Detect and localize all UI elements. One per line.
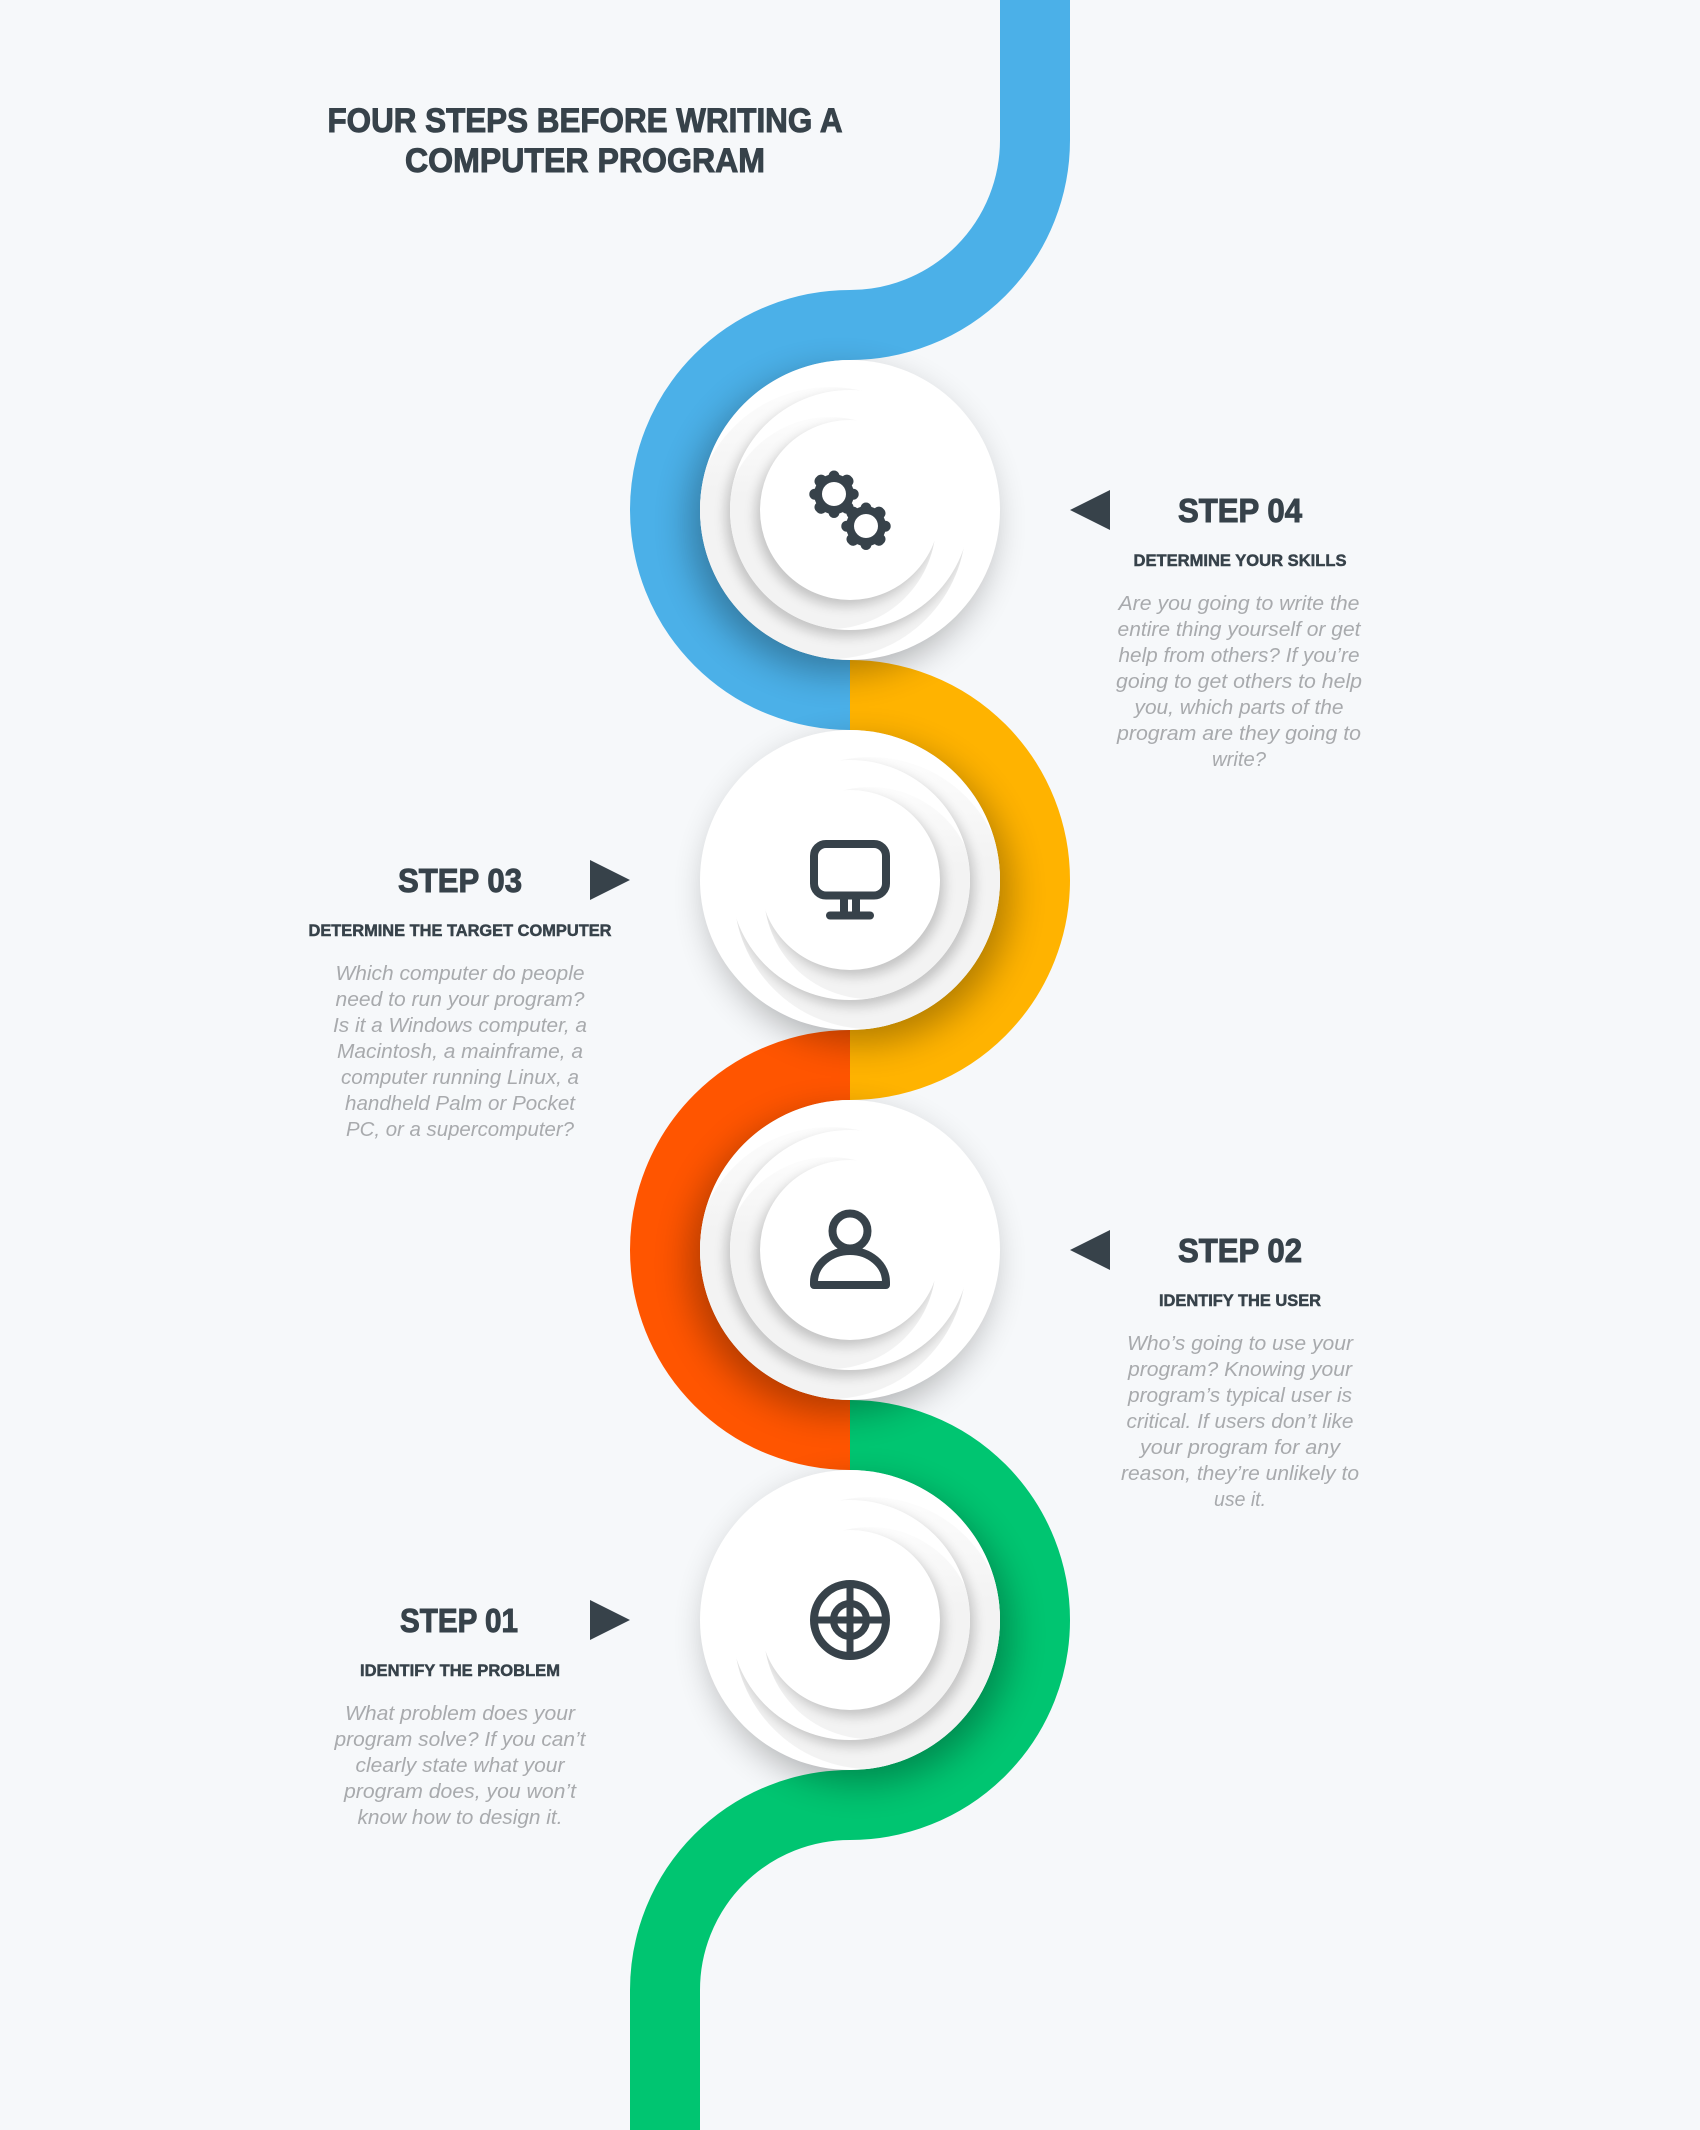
text block: step 04 [1116, 492, 1362, 771]
arrow: step 03 [590, 860, 630, 900]
icon: user [814, 1214, 886, 1285]
text block: step 04: program are they going to [1116, 723, 1361, 745]
text block: step 03: computer running Linux, a [341, 1067, 579, 1089]
text block: step 03 [308, 862, 612, 1141]
text block: step 03: STEP 03 [398, 862, 522, 899]
text block: step 04: entire thing yourself or get [1118, 619, 1362, 641]
text block: step 04: DETERMINE YOUR SKILLS [1134, 551, 1346, 570]
text block: step 02: STEP 02 [1178, 1232, 1302, 1269]
text block: step 02: use it. [1214, 1489, 1266, 1511]
title: COMPUTER PROGRAM [405, 142, 765, 180]
text block: step 01 [333, 1602, 587, 1829]
winding road [665, 0, 1035, 2130]
text block: step 01: program solve? If you can’t [333, 1729, 587, 1751]
text block: step 02: program’s typical user is [1127, 1385, 1352, 1407]
text block: step 02: Who’s going to use your [1127, 1333, 1354, 1355]
text block: step 03: Macintosh, a mainframe, a [337, 1041, 583, 1063]
disc: step 02 [690, 1100, 1000, 1413]
text block: step 03: DETERMINE THE TARGET COMPUTER [308, 921, 612, 940]
text block: step 03: Is it a Windows computer, a [333, 1015, 587, 1037]
icon: target [814, 1584, 886, 1656]
text block: step 04: going to get others to help [1116, 671, 1362, 693]
text block: step 01: clearly state what your [356, 1755, 566, 1777]
text block: step 04: STEP 04 [1178, 492, 1303, 529]
text block: step 04: write? [1212, 749, 1267, 771]
text block: step 04: Are you going to write the [1117, 593, 1360, 615]
text block: step 01: What problem does your [345, 1703, 576, 1725]
text block: step 03: handheld Palm or Pocket [345, 1093, 576, 1115]
text block: step 02: critical. If users don’t like [1126, 1411, 1354, 1433]
text block: step 01: STEP 01 [400, 1602, 518, 1639]
text block: step 02 [1121, 1232, 1359, 1511]
disc: step 01 [700, 1470, 1010, 1783]
text block: step 03: need to run your program? [336, 989, 585, 1011]
disc: step 04 [690, 360, 1000, 673]
road segment: orange [665, 1065, 850, 1435]
text block: step 01: know how to design it. [358, 1807, 562, 1829]
road segment: yellow [850, 695, 1035, 1065]
arrow: step 01 [590, 1600, 630, 1640]
arrow: step 04 [1070, 490, 1110, 530]
text block: step 02: program? Knowing your [1127, 1359, 1353, 1381]
text block: step 03: PC, or a supercomputer? [346, 1119, 575, 1141]
text block: step 03: Which computer do people [336, 963, 584, 985]
title: FOUR STEPS BEFORE WRITING A [328, 102, 842, 140]
text block: step 01: program does, you won’t [343, 1781, 578, 1803]
text block: step 04: you, which parts of the [1132, 697, 1344, 719]
text block: step 02: reason, they’re unlikely to [1121, 1463, 1359, 1485]
icon: monitor [814, 844, 886, 916]
road segment: green [665, 1435, 1035, 2130]
text block: step 04: help from others? If you’re [1118, 645, 1360, 667]
text block: step 02: IDENTIFY THE USER [1159, 1291, 1321, 1310]
text block: step 01: IDENTIFY THE PROBLEM [360, 1661, 560, 1680]
title [328, 102, 842, 180]
road segment: blue [665, 0, 1035, 695]
arrow: step 02 [1070, 1230, 1110, 1270]
text block: step 02: your program for any [1138, 1437, 1341, 1459]
disc: step 03 [700, 730, 1010, 1043]
icon: gears [809, 470, 891, 550]
